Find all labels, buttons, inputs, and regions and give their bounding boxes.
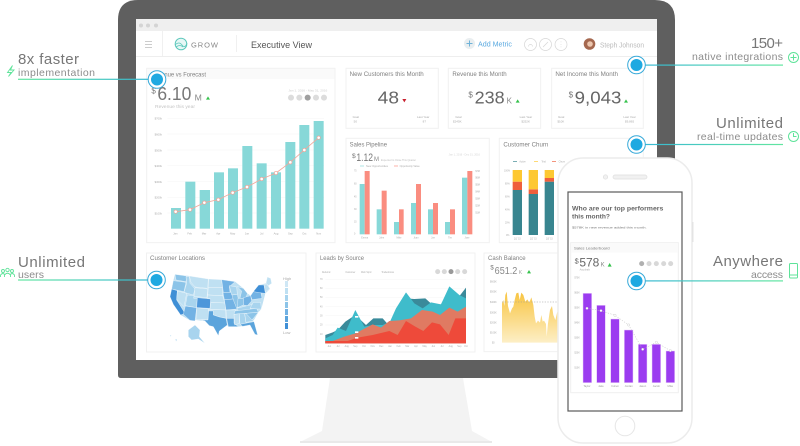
area chart: Web Sprd	[361, 271, 372, 274]
panel: sales pipeline: $4M	[475, 192, 480, 194]
panel: net income: Goal	[558, 115, 565, 119]
area chart: Oct	[464, 345, 468, 348]
panel: revenue this month: Last Year	[520, 115, 532, 119]
icon: clock	[788, 132, 798, 142]
panel: new customers: Goal	[353, 115, 359, 119]
panel: revenue vs forecast: Nov	[316, 231, 322, 235]
panel: sales pipeline: 30	[354, 209, 357, 211]
panel: sales pipeline: Juan	[413, 238, 419, 240]
panel: sales pipeline: 0	[354, 233, 356, 235]
panel: revenue vs forecast: $400k	[155, 164, 163, 168]
panel: sales leaderboard: Mike	[668, 384, 674, 388]
area chart: 50	[320, 297, 323, 299]
view title: Executive View	[251, 40, 312, 51]
panel: customer churn: Q3 '15	[546, 238, 553, 240]
panel: sales leaderboard: $70K	[574, 278, 580, 280]
panel: sales leaderboard: Cohen	[611, 384, 619, 388]
panel: customer churn: 0%	[506, 235, 509, 237]
panel: sales pipeline: Sales Pipeline	[350, 142, 388, 148]
panel: cash balance: $100K	[490, 333, 497, 335]
panel: sales pipeline: Expected to Close This Quarter	[381, 159, 416, 162]
area chart: 60	[320, 288, 323, 290]
callout: 150+ native integrations: 150+	[751, 35, 783, 52]
panel: sales pipeline: $7M	[475, 171, 480, 173]
user	[584, 38, 644, 50]
callout: anywhere access: Anywhere	[713, 253, 783, 270]
panel: sales pipeline: $6M	[475, 178, 480, 180]
panel: revenue vs forecast: May	[230, 231, 236, 235]
panel: sales leaderboard: Jacob	[653, 384, 660, 388]
panel: new customers: 48	[378, 88, 399, 108]
browser title bar	[136, 19, 657, 31]
panel: sales leaderboard: 578	[579, 256, 600, 270]
panel: sales pipeline: 75	[354, 171, 357, 173]
panel: sales leaderboard: $10K	[574, 368, 580, 370]
icon: plus	[788, 52, 798, 62]
panel: sales leaderboard: Jordan	[625, 384, 633, 388]
panel: new customers: New Customers this Month	[350, 72, 424, 78]
panel: sales pipeline: Jan 1, 2016 - Dec 31, 2016	[449, 155, 481, 157]
area chart: Sep	[353, 346, 358, 348]
panel: customer churn: Customer Churn	[503, 142, 548, 148]
US map	[170, 274, 272, 343]
phone heading: Who are our top performers	[572, 206, 664, 212]
panel: revenue vs forecast: Aug	[274, 231, 279, 235]
user: Steph Johnson	[600, 40, 644, 50]
panels: top KPI row and middle charts	[346, 68, 643, 243]
area chart: Sep	[457, 346, 462, 348]
panel: revenue this month: Goal	[455, 115, 462, 119]
area chart: Jul	[441, 346, 444, 348]
panel: revenue this month: $252K	[521, 119, 530, 123]
panel: leads by source: Leads by Source	[320, 255, 364, 262]
panel: revenue vs forecast: Revenue vs Forecast	[151, 72, 206, 78]
callout: 150+ native integrations	[628, 35, 798, 74]
panel: sales pipeline: Emma	[361, 238, 369, 240]
callout: unlimited users: users	[18, 269, 44, 281]
panel: sales leaderboard: Avg deals	[580, 269, 591, 272]
panel: revenue this month: $245K	[453, 119, 462, 123]
callout: 8x faster implementation	[8, 51, 166, 88]
map legend: High	[283, 276, 291, 281]
panel: sales pipeline: $2M	[475, 206, 480, 208]
panel: revenue vs forecast: Jan 1, 2016 - May 31, 2016	[288, 89, 328, 93]
home button	[615, 416, 635, 436]
callout: 150+ native integrations: native integrations	[692, 51, 783, 63]
panel: sales leaderboard: K	[601, 263, 605, 269]
panel: cash balance: $	[490, 265, 494, 271]
panel: sales pipeline: Jose	[465, 238, 470, 240]
panel: net income: $	[569, 90, 574, 99]
panel: revenue this month: K	[507, 96, 513, 105]
panel: revenue vs forecast: $500k	[155, 148, 163, 152]
area chart: 70	[320, 279, 323, 281]
panel: revenue vs forecast: Jan	[173, 231, 178, 235]
panel: revenue vs forecast: Oct	[302, 231, 307, 235]
area chart: Feb	[397, 346, 401, 348]
panel: sales leaderboard: Taylor	[583, 384, 591, 388]
panel: revenue vs forecast: $	[151, 86, 156, 95]
panel: revenue this month: Revenue this Month	[452, 72, 507, 78]
area chart: 10	[320, 334, 323, 336]
panel: revenue vs forecast: Jul	[260, 231, 264, 235]
panel: revenue vs forecast	[147, 68, 335, 243]
panel: sales pipeline: $1M	[475, 213, 480, 215]
icon: mobile phone	[790, 264, 798, 278]
panel: customer churn: 100%	[504, 170, 510, 172]
panel: cash balance	[484, 253, 564, 352]
callout: anywhere access: access	[751, 269, 783, 281]
panel: leads by source	[316, 253, 475, 352]
panel: sales pipeline: $3M	[475, 199, 480, 201]
header tools	[524, 38, 567, 50]
panel: net income: Net Income this Month	[555, 72, 618, 78]
map legend	[283, 276, 291, 335]
panel: cash balance: K	[519, 270, 523, 276]
panel: sales pipeline: Opportunity Value	[400, 165, 420, 168]
panel: sales leaderboard: Sales Leaderboard	[574, 247, 610, 251]
callout: unlimited real-time updates	[628, 115, 798, 153]
panel: revenue this month: 238	[475, 88, 505, 108]
panel: cash balance: 651.2	[495, 266, 518, 277]
map legend: Low	[283, 330, 290, 335]
area chart: Nov	[371, 346, 376, 348]
panel: sales pipeline: 15	[354, 222, 357, 224]
panel: revenue vs forecast: $700k	[155, 117, 163, 121]
monitor frame	[118, 0, 675, 378]
panel: sales pipeline: 60	[354, 184, 357, 186]
panel: customer churn: Churn	[559, 161, 566, 164]
panel: cash balance: $400K	[490, 302, 497, 304]
panel: customer churn: 60%	[505, 196, 510, 198]
area chart: Jun	[431, 346, 436, 348]
panel: customer churn: Q2 '15	[530, 238, 537, 240]
area chart: 20	[320, 325, 323, 327]
area chart: 30	[320, 315, 323, 317]
phone heading	[572, 206, 664, 221]
phone screen	[568, 192, 682, 411]
callout: anywhere access	[628, 253, 798, 290]
icon: lightning bolt	[8, 66, 14, 76]
area chart: Aug	[345, 345, 349, 348]
panel: sales leaderboard: $	[575, 256, 579, 265]
logo: GROW	[191, 40, 219, 50]
area chart: May	[422, 346, 428, 348]
panel: customer locations: Customer Locations	[150, 255, 206, 262]
panel: net income	[552, 68, 643, 128]
panel: customer churn: Active	[519, 161, 526, 164]
panel: net income: 9,043	[575, 88, 621, 108]
panel: sales leaderboard: $50K	[574, 308, 580, 310]
panel: sales leaderboard: $30K	[574, 338, 580, 340]
area chart: Tradeshows	[381, 271, 395, 274]
panel: cash balance: $300K	[490, 312, 497, 314]
callout: 8x faster implementation: implementation	[18, 67, 95, 79]
panel: sales pipeline: John	[379, 238, 385, 240]
phone heading: this month?	[572, 215, 610, 221]
panel: sales pipeline: Tim	[448, 238, 452, 240]
panel: sales leaderboard: Jason	[639, 384, 647, 388]
area chart: 40	[320, 306, 323, 308]
panel: new customers	[346, 68, 438, 128]
panel: sales pipeline: 1.12	[356, 152, 373, 164]
area chart: Jul	[337, 346, 340, 348]
callout: unlimited real-time updates: Unlimited	[716, 115, 783, 132]
callout: unlimited users	[0, 254, 165, 289]
area chart: Customer	[345, 271, 356, 274]
phone subtext: $578K in new revenue added this month.	[572, 226, 647, 230]
app header	[136, 31, 657, 57]
panel: new customers: 50	[354, 119, 357, 123]
panel: revenue vs forecast: Revenue this year	[155, 104, 196, 109]
area chart: Jan	[388, 346, 393, 348]
area chart: Jun	[327, 346, 332, 348]
panel: revenue vs forecast: Mar	[202, 231, 206, 235]
callout: unlimited users: Unlimited	[18, 254, 85, 271]
panel: customer churn: 40%	[505, 209, 510, 211]
panel: sales leaderboard	[571, 243, 678, 393]
panel: sales leaderboard: $20K	[574, 353, 580, 355]
panel: sales pipeline: 45	[354, 196, 357, 198]
panel: revenue vs forecast: Sep	[288, 231, 293, 235]
add metric	[464, 38, 512, 49]
area chart: Dec	[379, 346, 384, 348]
panel: sales pipeline: $5M	[475, 185, 480, 187]
panel: revenue vs forecast: $200k	[155, 196, 163, 200]
panel: customer churn: Trial	[541, 161, 546, 164]
panel: customer churn	[499, 138, 643, 243]
panel: revenue vs forecast: Feb	[187, 231, 192, 235]
panel: new customers: 87	[423, 119, 426, 123]
area chart: Aug	[449, 345, 453, 348]
callout: unlimited real-time updates: real-time updates	[697, 131, 783, 143]
panel: sales leaderboard: $40K	[574, 323, 580, 325]
panel: cash balance: $500K	[490, 292, 497, 294]
dashboard screen	[136, 19, 657, 360]
panel: sales pipeline: Joe	[431, 238, 436, 240]
panel: net income: $10K	[557, 119, 564, 123]
bars	[171, 121, 324, 229]
phone	[558, 158, 694, 443]
panel: revenue vs forecast: Jun	[245, 231, 250, 235]
panel: revenue this month: $	[468, 90, 473, 99]
area chart: Referral	[322, 271, 331, 274]
area chart	[320, 269, 468, 348]
panel: sales pipeline: $	[352, 153, 356, 160]
panel: sales leaderboard: $60K	[574, 293, 580, 295]
monitor stand	[300, 378, 492, 443]
logo	[175, 38, 219, 50]
panel: net income: Last Year	[623, 115, 636, 119]
panel: customer churn: Q1 '15	[514, 238, 521, 240]
forecast line	[176, 138, 319, 212]
phone speaker	[603, 175, 647, 179]
panel: cash balance: $0	[492, 343, 495, 345]
icon: users	[0, 268, 14, 277]
panel: revenue vs forecast: $300k	[155, 180, 163, 184]
panel: revenue this month	[448, 68, 541, 128]
panel: customer churn: 80%	[505, 183, 510, 185]
panel: revenue vs forecast: $100k	[155, 211, 163, 215]
panel: sales pipeline	[346, 138, 489, 243]
add metric: Add Metric	[478, 40, 512, 48]
area chart: Oct	[362, 345, 366, 348]
panel: revenue vs forecast: Apr	[216, 231, 221, 235]
panel: new customers: Last Year	[417, 115, 429, 119]
panel: sales pipeline: New Opportunities	[366, 165, 389, 168]
panel: cash balance: Cash Balance	[488, 256, 526, 262]
panel: sales leaderboard: Jake	[598, 384, 604, 388]
panel: customer churn: 20%	[505, 222, 510, 224]
panel: revenue vs forecast: 6.10	[157, 83, 191, 104]
area chart: Mar	[405, 345, 410, 348]
panel: revenue vs forecast: $600k	[155, 132, 163, 136]
panel: cash balance: $200K	[490, 323, 497, 325]
panel: net income: $9,865	[625, 119, 634, 123]
panel: customer locations	[146, 253, 306, 352]
area chart: Apr	[414, 345, 418, 348]
panel: sales pipeline: Mike	[397, 238, 402, 240]
panel: revenue vs forecast: M	[195, 92, 202, 102]
panel: cash balance: $600K	[490, 281, 497, 283]
panel: sales pipeline: M	[374, 157, 379, 163]
callout: 8x faster implementation: 8x faster	[18, 51, 79, 68]
